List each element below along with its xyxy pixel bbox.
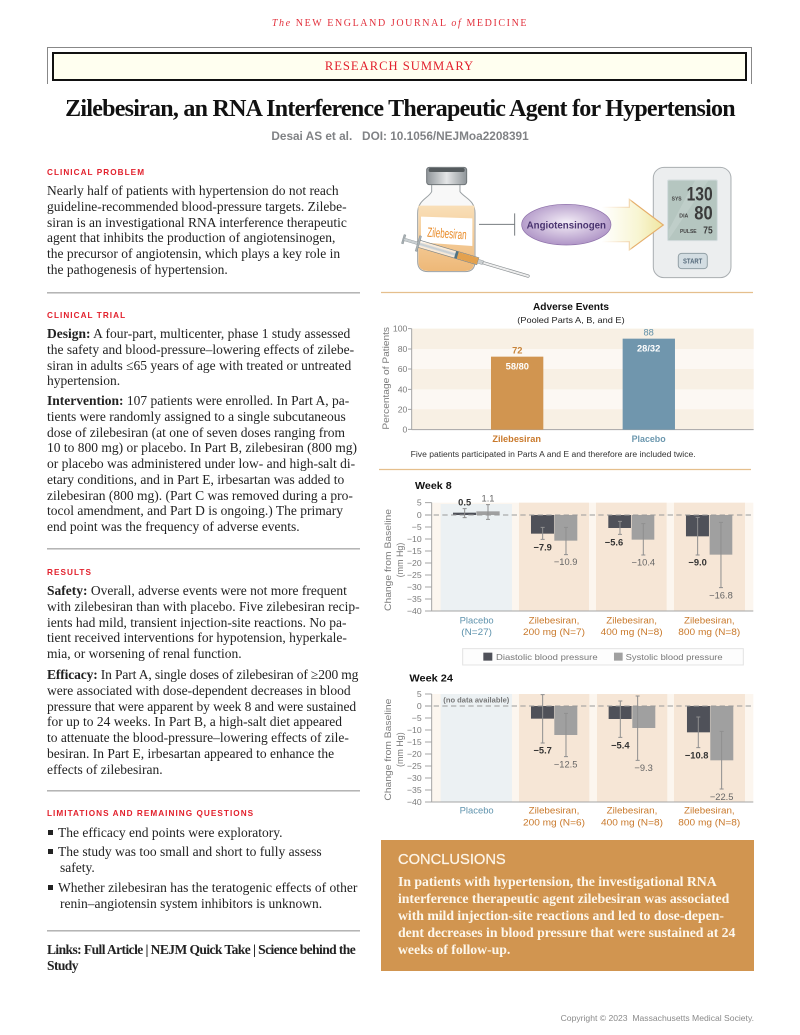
bars: systolic	[554, 706, 733, 760]
conclusions text: dent decreases in blood pressure that were sustained at 24	[398, 925, 735, 940]
value labels: 0.5	[458, 498, 471, 508]
text: clinical problem: the pathogenesis of hypertension.	[47, 262, 228, 277]
y axis labels: −25	[407, 761, 422, 771]
y axis labels: 0	[403, 424, 408, 434]
category labels: Zilebesiran,	[684, 806, 735, 816]
banner label	[52, 52, 747, 81]
value labels: −9.3	[634, 763, 653, 773]
y axis title	[383, 699, 405, 801]
category labels: Zilebesiran,	[607, 806, 657, 816]
chart title: Adverse Events	[533, 302, 609, 313]
text: clinical problem: agent that inhibits the production of angiotensinogen,	[47, 230, 335, 245]
value labels: −22.5	[710, 792, 733, 802]
y axis labels: −15	[407, 546, 422, 556]
y axis labels: 60	[398, 364, 408, 374]
error bars	[541, 695, 724, 789]
y axis labels: 20	[398, 404, 408, 414]
heading: clinical trial: CLINICAL TRIAL	[47, 311, 126, 320]
category labels	[492, 434, 666, 444]
icon: blood pressure monitor: 75	[703, 225, 713, 236]
legend: Diastolic blood pressure	[496, 652, 598, 662]
text: clinical problem	[47, 183, 347, 277]
masthead: The NEW ENGLAND JOURNAL of MEDICINE	[272, 18, 528, 29]
illustration: mechanism	[400, 167, 731, 284]
text: intervention: tocol amendment, and Part D is ongoing.) The primary	[47, 503, 343, 518]
bar: placebo	[623, 328, 675, 430]
y axis labels: −35	[407, 594, 422, 604]
y axis labels: −40	[407, 797, 422, 807]
inhibition line	[479, 213, 515, 236]
icon: vial	[418, 167, 475, 272]
icon: blood pressure monitor	[653, 167, 731, 278]
y axis title: Percentage of Patients	[381, 326, 391, 430]
y axis labels: −35	[407, 785, 422, 795]
text: safety: Safety: Overall, adverse events were not more frequent	[47, 583, 347, 598]
y axis labels: −15	[407, 737, 422, 747]
conclusions text: weeks of follow-up.	[398, 942, 510, 957]
value labels: −16.8	[709, 591, 733, 601]
text: intervention	[47, 393, 357, 534]
angiotensinogen ellipse	[522, 204, 611, 245]
bars: diastolic	[453, 513, 709, 536]
bar: zilebesiran: 72	[512, 345, 523, 355]
links	[47, 942, 356, 973]
icon: blood pressure monitor: DIA	[679, 214, 688, 220]
y axis labels	[407, 689, 422, 807]
panel: conclusions	[381, 840, 754, 971]
text: safety: ients had mild, transient injection-site reactions. No pa-	[47, 614, 347, 630]
text: intervention: tients were randomly assigned to a single subcutaneous	[47, 409, 346, 424]
text: intervention: 10 to 800 mg) or placebo. In Part B, zilebesiran (800 mg)	[47, 440, 357, 455]
value labels: −9.0	[688, 558, 707, 568]
no data note: (no data available)	[443, 695, 510, 704]
heading: results: RESULTS	[47, 568, 92, 577]
chart: week 8	[383, 481, 753, 665]
arrow	[602, 199, 663, 250]
heading: limitations: LIMITATIONS AND REMAINING QUESTIONS	[47, 809, 254, 818]
value labels	[533, 740, 733, 802]
category labels: 800 mg (N=8)	[678, 627, 740, 637]
angiotensinogen ellipse: Angiotensinogen	[527, 220, 606, 231]
text: intervention: or placebo was administered under low- and high-salt di-	[47, 456, 355, 471]
y axis labels: −20	[407, 558, 422, 568]
banner: research summary	[47, 47, 752, 84]
text: clinical problem: the precursor of angiotensin, which plays a key role in	[47, 246, 340, 261]
y axis labels: −10	[407, 725, 422, 735]
category labels: Placebo	[460, 806, 494, 816]
title: Zilebesiran, an RNA Interference Therapeutic Agent for Hypertension	[65, 96, 735, 122]
bullet list: limitations: safety.	[60, 860, 95, 875]
category labels: 400 mg (N=8)	[601, 627, 663, 637]
y axis title: Change from Baseline	[383, 699, 393, 801]
y axis labels: 40	[398, 384, 408, 394]
conclusions text: with mild injection-site reactions and led to dose-depen-	[398, 908, 724, 923]
category labels: Zilebesiran,	[684, 615, 735, 625]
y axis labels: −30	[407, 773, 422, 783]
category labels: Zilebesiran,	[606, 615, 657, 625]
text: clinical problem: Nearly half of patients with hypertension do not reach	[47, 183, 339, 198]
y axis labels	[407, 498, 422, 616]
y axis labels: −40	[407, 606, 422, 616]
conclusions text	[398, 874, 736, 957]
category labels: 800 mg (N=8)	[678, 817, 740, 827]
icon: blood pressure monitor: 130	[687, 185, 713, 206]
conclusions text: interference therapeutic agent zilebesiran was associated	[398, 891, 729, 906]
text: efficacy	[47, 667, 358, 776]
y axis labels: 100	[393, 324, 408, 334]
text: intervention: etary conditions, and in Part E, irbesartan was added to	[47, 472, 344, 487]
category labels: Placebo	[460, 615, 494, 625]
value labels: −10.9	[554, 557, 577, 567]
bar: zilebesiran	[491, 345, 543, 430]
category labels: 200 mg (N=7)	[523, 627, 585, 637]
chart: adverse events	[381, 302, 754, 459]
y axis labels: −30	[407, 582, 422, 592]
text: efficacy: pressure that were apparent by week 8 and were sustained	[47, 698, 356, 714]
y axis labels: 0	[417, 510, 422, 520]
links: Study	[47, 958, 78, 973]
y axis labels	[393, 324, 408, 434]
bullet list: limitations: Whether zilebesiran has the teratogenic effects of other	[58, 880, 357, 895]
y axis labels: −10	[407, 534, 422, 544]
y axis labels: −5	[412, 522, 422, 532]
copyright: Copyright © 2023 Massachusetts Medical Society.	[561, 1013, 754, 1023]
bar: zilebesiran: 58/80	[506, 361, 529, 371]
y axis title: (mm Hg)	[395, 543, 405, 577]
value labels	[458, 493, 733, 601]
category labels: (N=27)	[461, 627, 492, 637]
icon: syringe	[400, 231, 532, 284]
category labels: 400 mg (N=8)	[601, 817, 663, 827]
icon: blood pressure monitor: SYS	[672, 196, 682, 202]
footnote: Five patients participated in Parts A and E and therefore are included twice.	[411, 450, 696, 459]
y axis labels: 5	[417, 689, 422, 699]
text: efficacy: for up to 24 weeks. In Part B, a high-salt diet appeared	[47, 714, 342, 729]
text: safety: tient received interventions for hypotension, hyperkale-	[47, 630, 347, 645]
week 8 title: Week 8	[415, 481, 452, 492]
value labels: −10.4	[632, 558, 655, 568]
value labels: −5.6	[605, 537, 623, 547]
icon: blood pressure monitor: PULSE	[680, 229, 697, 235]
y axis title: Change from Baseline	[383, 509, 393, 611]
text: intervention: zilebesiran (800 mg). (Part C was removed during a pro-	[47, 488, 353, 502]
text: efficacy: to attenuate the blood-pressure–lowering effects of zile-	[47, 730, 349, 745]
text: design	[47, 326, 354, 388]
category labels: Zilebesiran,	[529, 615, 579, 625]
category labels	[460, 615, 740, 637]
category labels: 200 mg (N=6)	[523, 817, 585, 827]
icon: blood pressure monitor: START	[683, 258, 703, 265]
text: intervention: end point was the frequency of adverse events.	[47, 519, 300, 534]
links: Links: Full Article | NEJM Quick Take | Science behind the	[47, 942, 355, 957]
legend	[463, 649, 743, 665]
heading: clinical problem: CLINICAL PROBLEM	[47, 168, 145, 177]
y axis title	[383, 509, 405, 611]
chart subtitle: (Pooled Parts A, B, and E)	[517, 315, 625, 325]
icon: vial: Zilebesiran	[427, 225, 467, 242]
value labels: −12.5	[554, 759, 577, 769]
text: efficacy: effects of zilebesiran.	[47, 762, 163, 776]
text: design: siran in adults ≤65 years of age with treated or untreated	[47, 358, 351, 372]
value labels: −5.4	[611, 740, 630, 750]
bullet list: limitations: The study was too small and short to fully assess	[58, 844, 322, 859]
text: efficacy: were associated with dose-dependent decreases in blood	[47, 683, 351, 698]
y axis labels: 5	[417, 498, 422, 508]
text: clinical problem: guideline-recommended blood-pressure targets. Zilebe-	[47, 199, 347, 214]
text: safety	[47, 583, 360, 661]
bars: systolic	[476, 511, 732, 555]
y axis title: (mm Hg)	[395, 732, 405, 767]
value labels: −10.8	[685, 750, 708, 760]
text: safety: with zilebesiran than with placebo. Five zilebesiran recip-	[47, 599, 360, 614]
y axis labels: 0	[417, 701, 422, 711]
value labels: −7.9	[533, 542, 552, 552]
chart: week 24	[383, 674, 753, 827]
banner label: RESEARCH SUMMARY	[325, 59, 474, 73]
bullet list: limitations: renin–angiotensin system inhibitors is unknown.	[60, 896, 322, 911]
text: design: Design: A four-part, multicenter, phase 1 study assessed	[47, 326, 350, 341]
text: design: the safety and blood-pressure–lowering effects of zilebe-	[47, 342, 354, 357]
icon: blood pressure monitor: 80	[694, 203, 713, 224]
text: efficacy: besiran. In Part E, irbesartan appeared to enhance the	[47, 746, 334, 761]
bar: placebo: 28/32	[637, 344, 660, 354]
text: design: hypertension.	[47, 373, 120, 388]
y axis labels: 80	[398, 344, 408, 354]
conclusions heading: CONCLUSIONS	[398, 852, 506, 868]
legend: Systolic blood pressure	[626, 652, 723, 662]
week 24 title: Week 24	[409, 674, 454, 685]
category labels	[460, 806, 740, 827]
bullet list: limitations	[48, 825, 358, 911]
bars: diastolic	[531, 706, 710, 732]
y axis labels: −25	[407, 570, 422, 580]
value labels: −5.7	[533, 746, 552, 756]
conclusions text: In patients with hypertension, the investigational RNA	[398, 874, 717, 889]
text: clinical problem: siran is an investigational RNA interference therapeutic	[47, 214, 347, 230]
text: efficacy: Efficacy: In Part A, single doses of zilebesiran of ≥200 mg	[47, 667, 358, 682]
y axis labels: −20	[407, 749, 422, 759]
category labels: Zilebesiran	[492, 434, 541, 444]
category labels: Placebo	[632, 434, 666, 444]
bar: placebo: 88	[643, 328, 654, 338]
y axis labels: −5	[412, 713, 422, 723]
text: intervention: dose of zilebesiran (at one of seven doses ranging from	[47, 424, 345, 440]
value labels: 1.1	[482, 493, 494, 503]
text: intervention: Intervention: 107 patients were enrolled. In Part A, pa-	[47, 393, 349, 408]
category labels: Zilebesiran,	[529, 806, 579, 816]
citation: Desai AS et al. DOI: 10.1056/NEJMoa2208391	[271, 129, 529, 143]
error bars	[463, 505, 723, 588]
text: safety: mia, or worsening of renal function.	[47, 646, 242, 661]
bullet list: limitations: The efficacy end points were exploratory.	[58, 825, 283, 840]
